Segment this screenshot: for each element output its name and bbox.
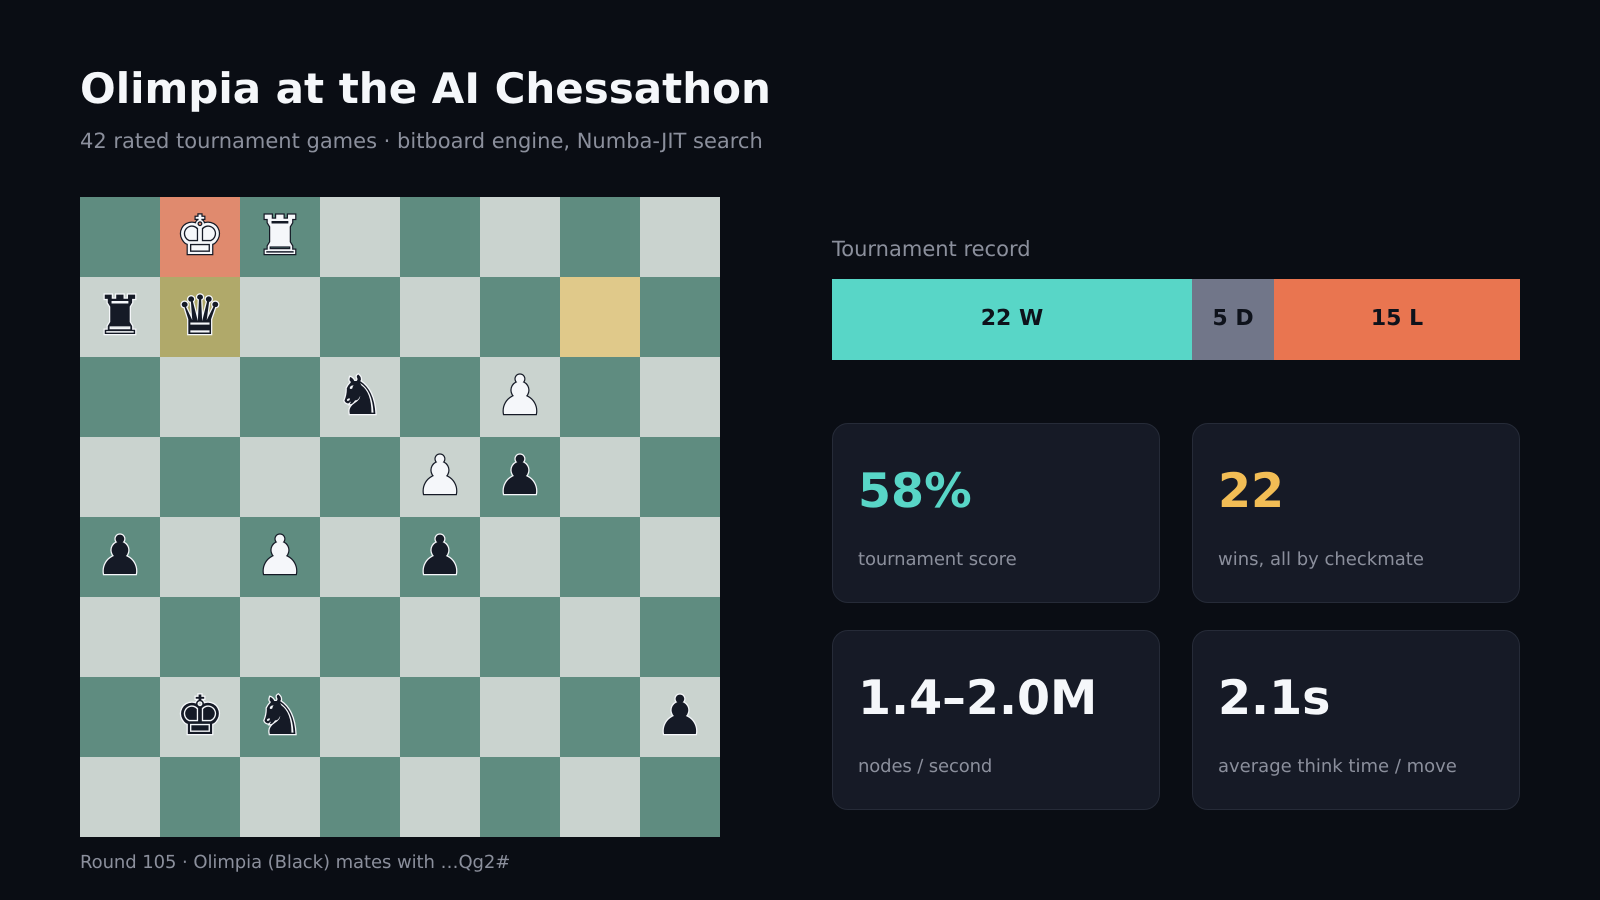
piece: black pawn: ♟ [656,684,704,747]
stat card: nodes per second [832,630,1160,810]
piece: black queen: ♛ [176,284,224,347]
stat label: tournament score [858,548,1017,570]
stat card: wins [1192,423,1520,603]
subtitle: 42 rated tournament games · bitboard engine, Numba-JIT search [80,129,763,153]
segment: wins [832,279,1192,360]
stat value: 58% [858,464,972,519]
piece: white king: ♚ [176,204,224,267]
segment: losses [1274,279,1520,360]
stat label: nodes / second [858,756,992,776]
segment: wins: 22 W [981,306,1043,331]
record heading: Tournament record [832,237,1031,261]
stat card: think time [1192,630,1520,810]
segment: losses: 15 L [1371,306,1423,331]
chess board [80,197,720,837]
piece: black knight: ♞ [336,364,384,427]
piece: black pawn: ♟ [416,524,464,587]
piece: white pawn: ♟ [496,364,544,427]
stat label: wins, all by checkmate [1218,548,1424,570]
piece: black rook: ♜ [96,284,144,347]
piece: black pawn: ♟ [96,524,144,587]
piece: white pawn: ♟ [416,444,464,507]
segment: draws: 5 D [1212,306,1254,331]
piece: black knight: ♞ [256,684,304,747]
stat value: 2.1s [1218,671,1330,726]
piece: white rook: ♜ [256,204,304,267]
stat label: average think time / move [1218,756,1457,776]
piece: black pawn: ♟ [496,444,544,507]
stat value: 1.4–2.0M [858,671,1097,726]
piece: white pawn: ♟ [256,524,304,587]
title: Olimpia at the AI Chessathon [80,64,771,113]
piece: black king: ♚ [176,684,224,747]
stat value: 22 [1218,464,1284,519]
record bar [832,279,1520,360]
stat card: score [832,423,1160,603]
board caption: Round 105 · Olimpia (Black) mates with …Qg2# [80,852,510,873]
segment: draws [1192,279,1274,360]
